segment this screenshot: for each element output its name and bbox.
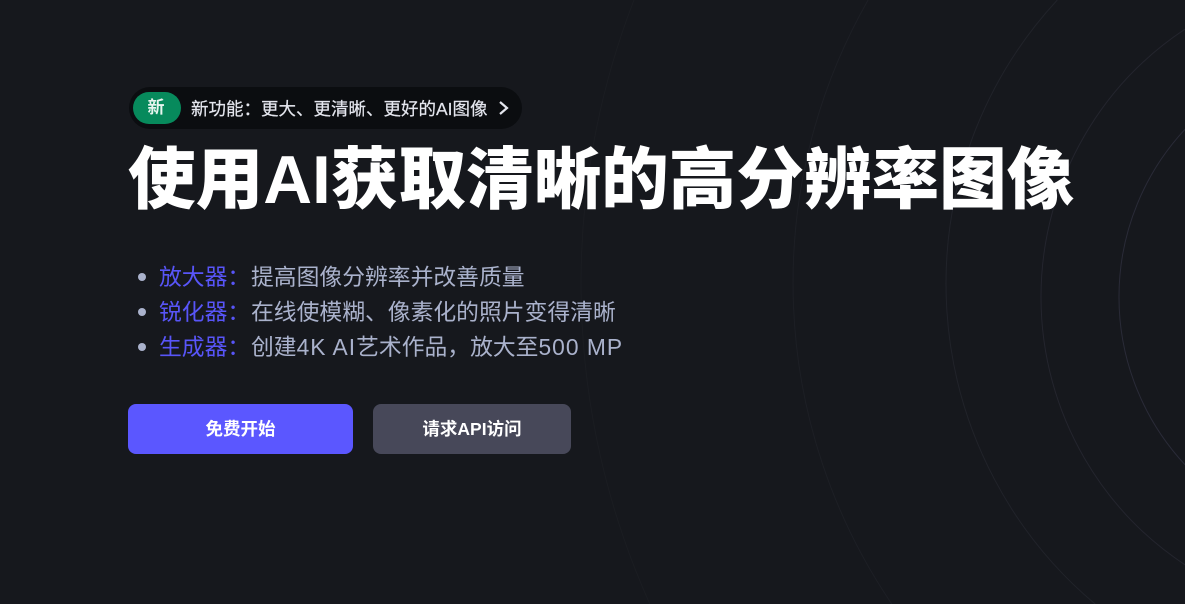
feature list: 锐化器： bbox=[159, 299, 250, 325]
list item: sharpener bbox=[138, 299, 616, 325]
list item: generator bbox=[138, 334, 623, 360]
feature list: 提高图像分辨率并改善质量 bbox=[251, 264, 525, 290]
badge: new: 新 bbox=[148, 98, 164, 117]
badge: new bbox=[133, 92, 181, 124]
announcement text: 新功能：更大、更清晰、更好的AI图像 bbox=[191, 99, 488, 119]
feature list bbox=[138, 264, 623, 360]
icon: chevron bbox=[499, 101, 509, 115]
button: request API: 请求API访问 bbox=[422, 419, 522, 439]
button: start free bbox=[128, 404, 353, 454]
button: request API bbox=[373, 404, 571, 454]
feature list: 生成器： bbox=[159, 334, 250, 360]
feature list: 放大器： bbox=[159, 264, 250, 290]
list item: upscaler bbox=[138, 264, 525, 290]
feature list: 在线使模糊、像素化的照片变得清晰 bbox=[251, 299, 616, 325]
feature list: 创建4K AI艺术作品，放大至500 MP bbox=[251, 334, 623, 360]
title: 使用AI获取清晰的高分辨率图像 bbox=[128, 143, 1074, 218]
button: start free: 免费开始 bbox=[206, 419, 276, 439]
announcement pill bbox=[129, 87, 522, 129]
